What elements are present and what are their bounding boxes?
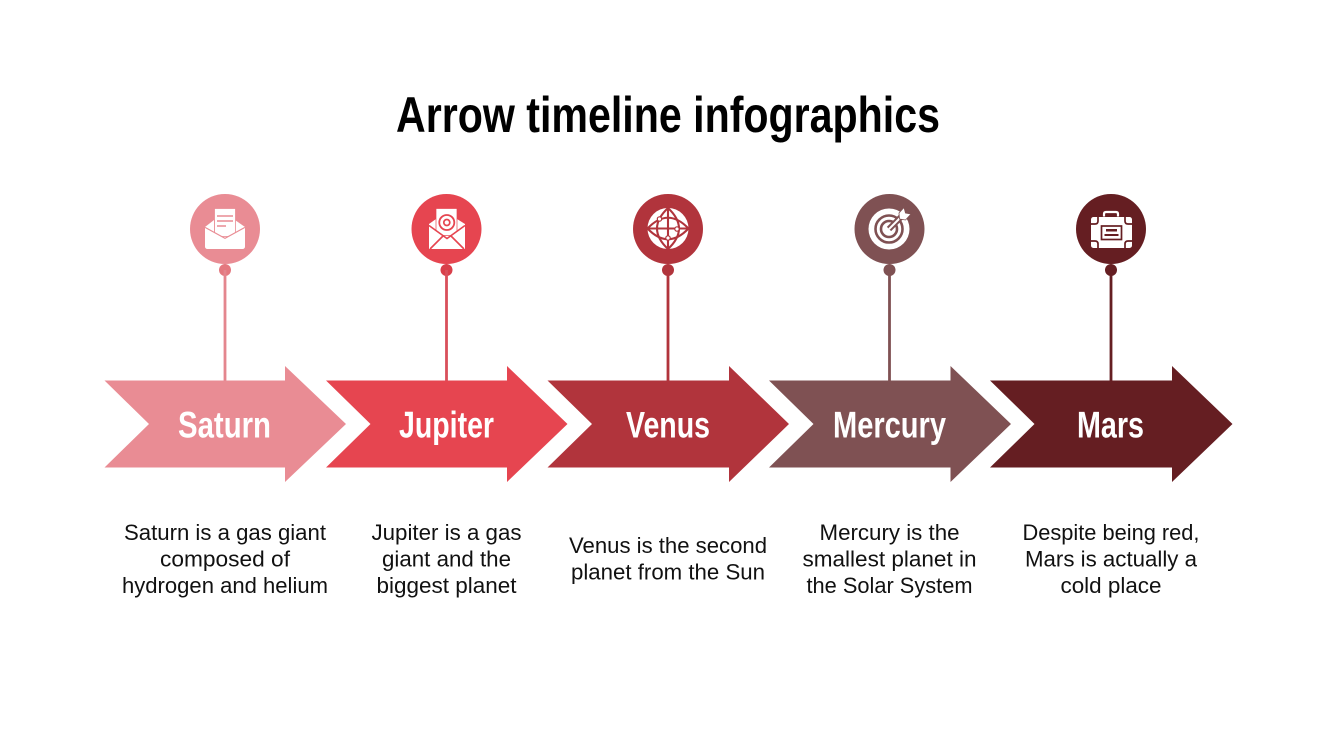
arrow [104, 366, 346, 482]
panel: Jupiter [326, 194, 568, 598]
description: Mars is actually a [1025, 546, 1197, 572]
icon: globe [633, 194, 703, 264]
description [802, 520, 976, 598]
description [569, 533, 767, 584]
description: hydrogen and helium [122, 573, 328, 598]
icon: target with dart [854, 194, 924, 264]
icon: suitcase [1076, 194, 1146, 264]
description: smallest planet in [802, 546, 976, 572]
description: biggest planet [376, 573, 517, 598]
connector stem [440, 264, 452, 381]
label: Saturn [178, 404, 271, 446]
connector stem [662, 264, 674, 381]
description: Despite being red, [1022, 520, 1200, 545]
description: Jupiter is a gas [372, 520, 522, 545]
connector stem [219, 264, 231, 381]
icon: open envelope with letter [190, 194, 260, 264]
panel: Mars [990, 194, 1232, 598]
description: planet from the Sun [571, 560, 765, 584]
arrow [990, 366, 1232, 482]
arrow [548, 366, 789, 482]
description: Mercury is the [820, 520, 960, 545]
icon: envelope with at sign [412, 194, 482, 264]
panel: Mercury [769, 194, 1011, 598]
description [372, 520, 522, 598]
arrow [326, 366, 568, 482]
description: the Solar System [806, 573, 972, 598]
description: cold place [1060, 573, 1162, 598]
description: Saturn is a gas giant [124, 520, 327, 545]
title: Arrow timeline infographics [396, 87, 940, 143]
description: Venus is the second [569, 533, 767, 558]
description [1022, 520, 1200, 598]
description: composed of [160, 546, 291, 572]
panel: Venus [548, 194, 789, 584]
description [122, 520, 328, 598]
connector stem [884, 264, 896, 381]
panel: Saturn [104, 194, 346, 598]
label: Mars [1077, 404, 1144, 446]
connector stem [1105, 264, 1117, 381]
description: giant and the [382, 546, 511, 572]
label: Venus [626, 404, 710, 446]
label: Jupiter [399, 404, 494, 446]
arrow [769, 366, 1011, 482]
label: Mercury [833, 404, 946, 446]
